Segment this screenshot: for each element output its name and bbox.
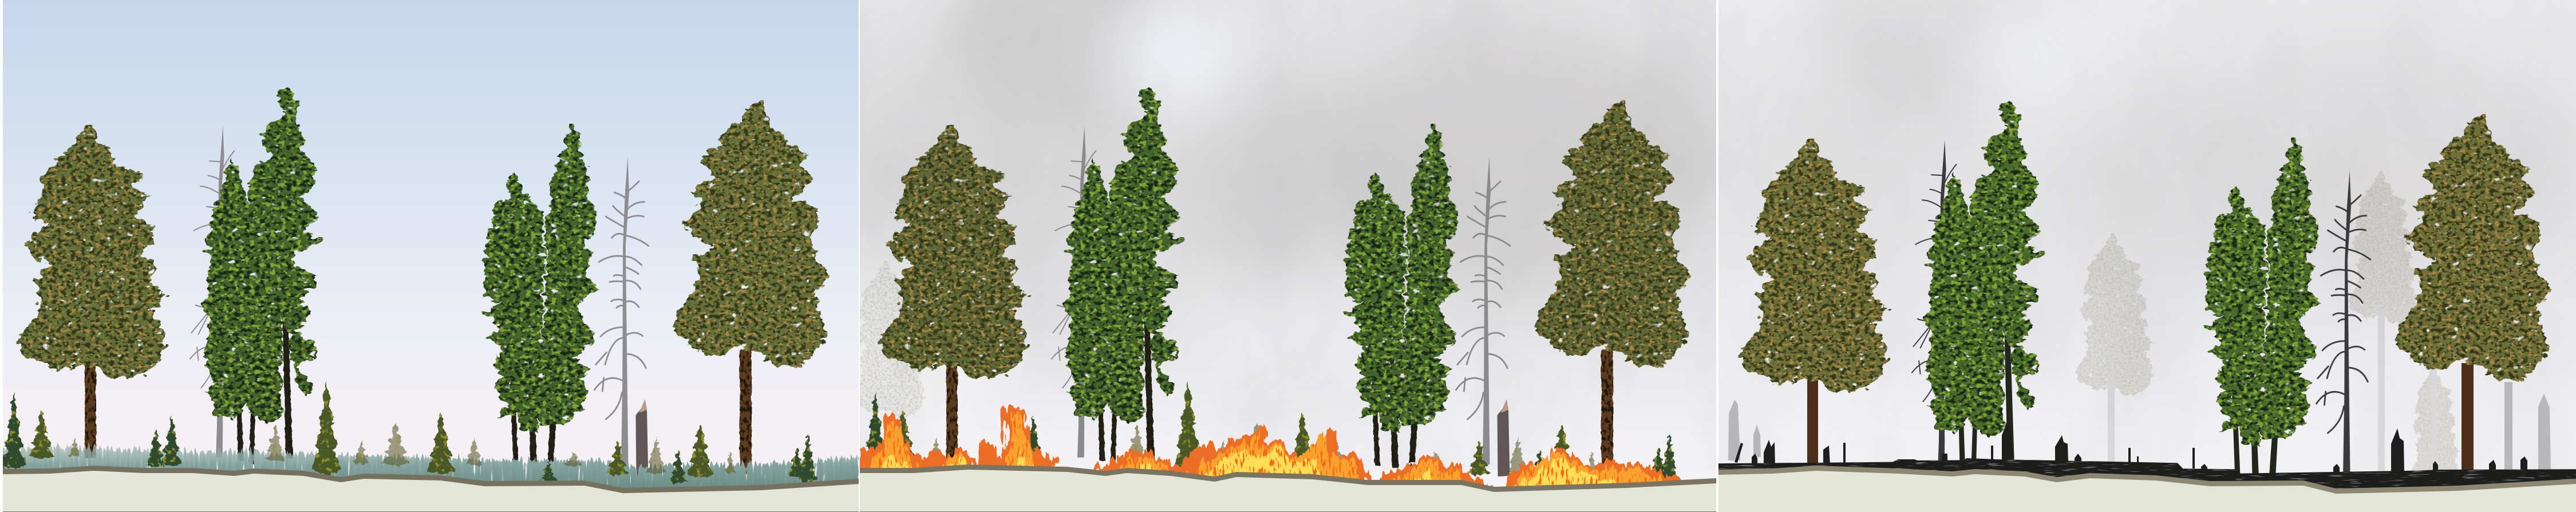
smoke texture [1718, 0, 2576, 470]
fir group left [200, 88, 323, 464]
charred stumps [1735, 420, 2527, 486]
dead snag right [1456, 156, 1510, 464]
ground: soil layer [1718, 466, 2576, 512]
left ponderosa pine [881, 125, 1028, 458]
dead snag left [1052, 126, 1096, 458]
right ponderosa pine [674, 101, 829, 474]
fir group right [1344, 125, 1459, 468]
ground: subsoil [860, 470, 1716, 511]
dead snag left [190, 126, 235, 458]
ghost tree in smoke [851, 261, 925, 418]
middle flame layer [864, 412, 1669, 490]
right ponderosa pine [1536, 101, 1690, 474]
rock [3, 463, 30, 469]
panel: unburned forest [1, 0, 859, 512]
panel: active surface fire with smoke [843, 0, 1716, 512]
surface flames [859, 407, 1686, 491]
right ponderosa pine [2396, 115, 2551, 478]
broken stump [636, 399, 648, 476]
smoke clouds [843, 0, 1713, 464]
ground: subsoil [1718, 471, 2576, 512]
left ponderosa pine [1741, 139, 1888, 465]
smoke texture [860, 0, 1716, 470]
ghost burned trees in smoke [2077, 171, 2459, 493]
charred ground debris [1717, 458, 2576, 493]
sky background [3, 0, 859, 512]
understory grass [3, 442, 859, 488]
ground: soil layer [3, 466, 859, 512]
flame core [880, 448, 1626, 490]
ghost snags in smoke [1728, 382, 2551, 471]
dead snag left [1912, 140, 1957, 471]
smoke background [860, 0, 1716, 512]
dead snag right [594, 156, 649, 464]
fir group left [1922, 101, 2045, 478]
outer orange flame layer [859, 407, 1686, 491]
fir group right [2204, 139, 2319, 482]
panel: after the fire with charred ground [1701, 0, 2576, 512]
saplings [863, 381, 1679, 483]
ground: subsoil [3, 471, 859, 511]
saplings [1, 381, 817, 483]
fir group right [483, 125, 597, 468]
smoke background [1718, 0, 2576, 512]
broken stump [1498, 399, 1510, 476]
left ponderosa pine [19, 125, 167, 458]
fir group left [1061, 88, 1185, 464]
ground: soil layer [860, 464, 1716, 512]
dead snag right [2316, 170, 2370, 478]
smoke clouds [1701, 0, 2571, 464]
